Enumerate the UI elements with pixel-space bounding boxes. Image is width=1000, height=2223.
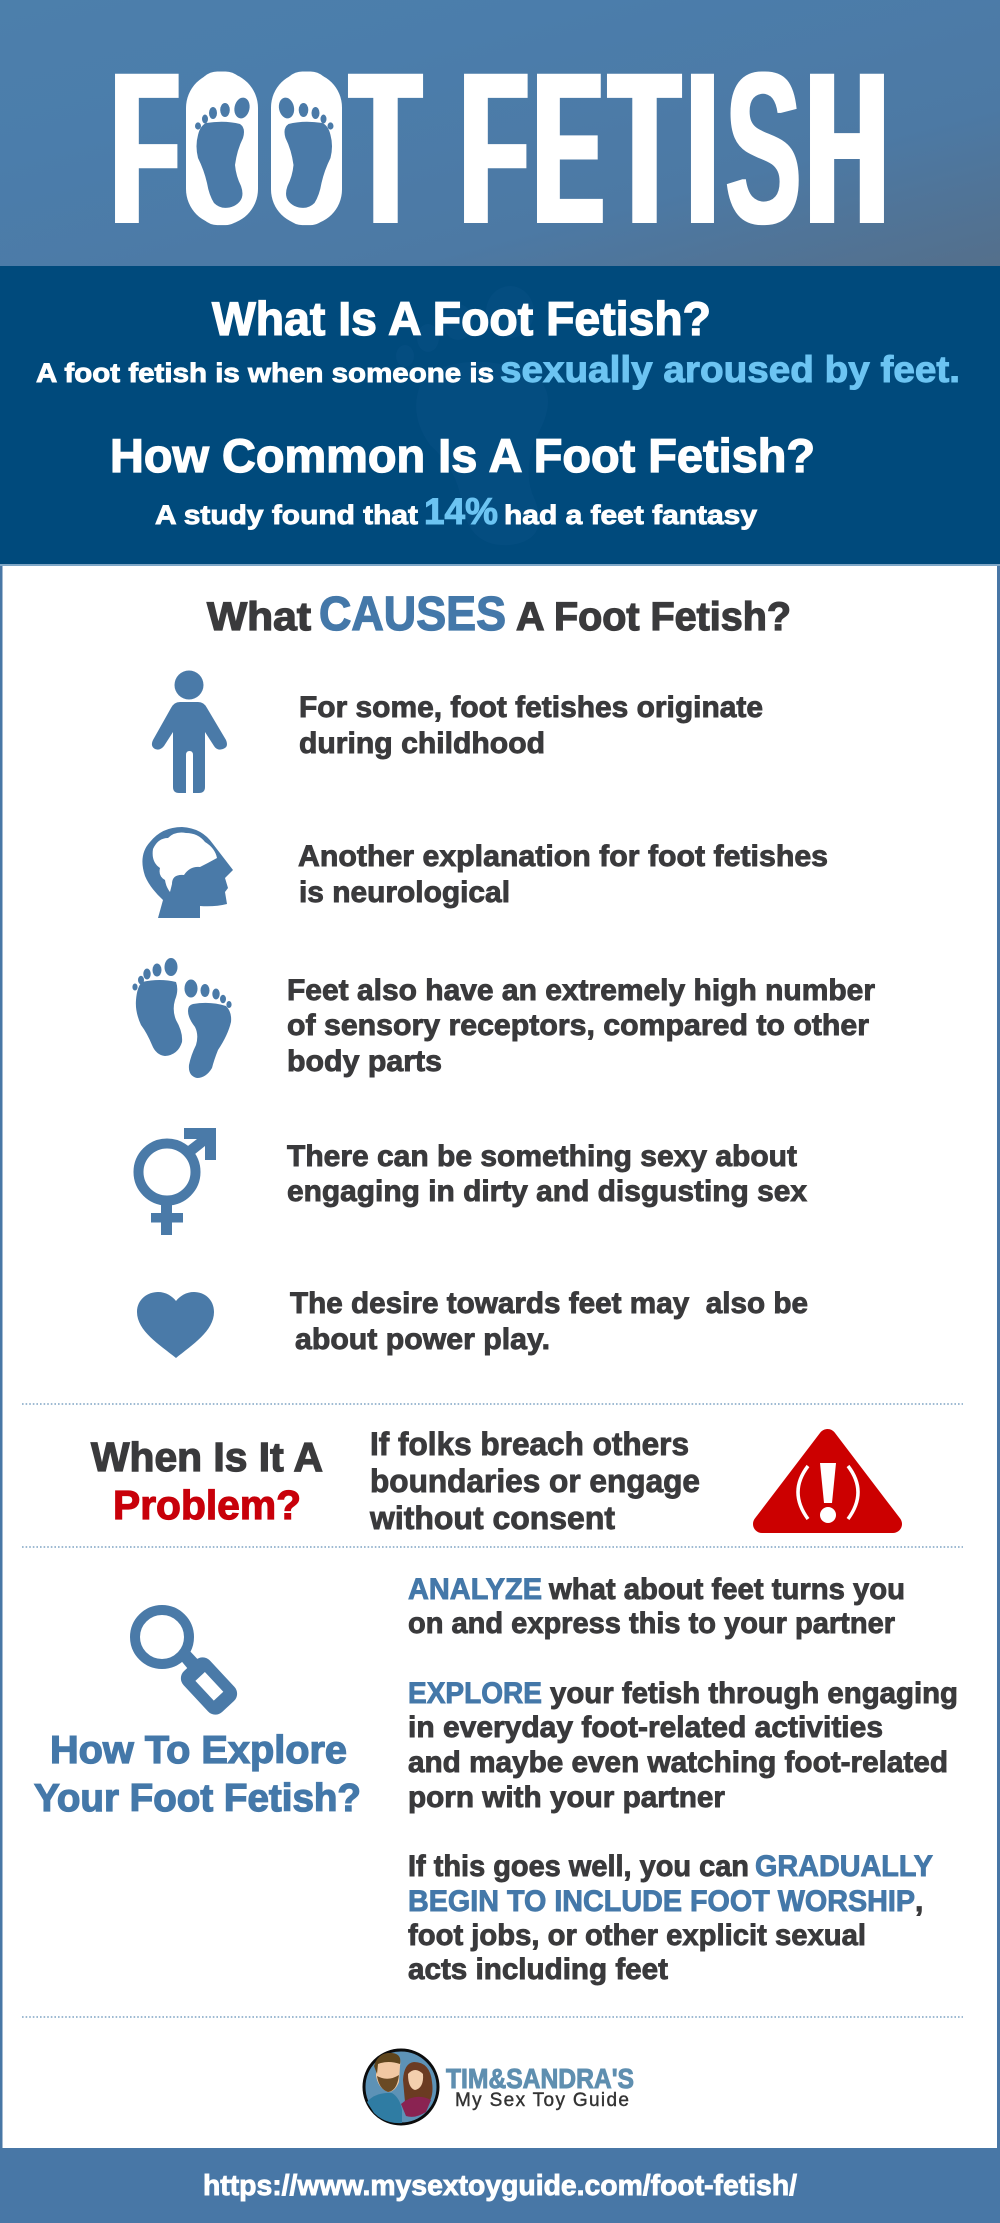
page side borders <box>0 566 1000 2151</box>
text: cause 5: The desire towards feet may also be <box>290 1287 808 1320</box>
text: explore step <box>408 1677 958 1814</box>
icon: child figure <box>152 670 227 793</box>
heading: when is it a problem <box>91 1434 323 1528</box>
logo: Tim and Sandra's portrait badge <box>364 2050 438 2124</box>
title: FOOT FETISH: F <box>112 27 179 270</box>
text: explore step: porn with your partner <box>408 1781 725 1814</box>
icon: head with brain <box>142 827 233 918</box>
text: cause 4: engaging in dirty and disgusting sex <box>287 1175 807 1208</box>
title: FOOT FETISH: I <box>688 28 717 270</box>
text: cause 5: about power play. <box>295 1323 550 1356</box>
text: problem description: without consent <box>369 1500 615 1536</box>
text: cause 3: Feet also have an extremely high number <box>287 974 875 1007</box>
text: definition: A foot fetish is when someone is <box>36 358 494 388</box>
text: cause 5 <box>290 1287 808 1356</box>
text: cause 1: during childhood <box>299 727 545 760</box>
heading: what is a foot fetish: What Is A Foot Fetish? <box>212 292 711 345</box>
text: study result: A study found that <box>155 500 418 530</box>
text: gradually step <box>408 1850 933 1986</box>
icon: right footprint in second O <box>277 96 334 208</box>
text: cause 1 <box>299 691 763 760</box>
text: cause 2: is neurological <box>299 876 510 909</box>
heading: what causes a foot fetish: What <box>207 595 311 639</box>
text: explore step: in everyday foot-related activities <box>408 1711 883 1744</box>
text: cause 2: Another explanation for foot fetishes <box>298 840 828 873</box>
heading: how to explore: How To Explore <box>50 1729 347 1772</box>
text: analyze step: ANALYZE <box>408 1573 542 1606</box>
text: study result: had a feet fantasy <box>504 500 757 530</box>
text: problem description: If folks breach others <box>370 1426 689 1462</box>
title: FOOT FETISH: T <box>610 26 679 269</box>
text: gradually step: GRADUALLY <box>755 1850 933 1883</box>
text: explore step: and maybe even watching foot-related <box>408 1746 948 1779</box>
text: analyze step <box>408 1573 905 1640</box>
text: cause 4: There can be something sexy about <box>287 1140 797 1173</box>
icon: gender symbol <box>138 1128 216 1235</box>
heading: what causes a foot fetish: A Foot Fetish? <box>516 595 791 639</box>
text: study result: 14% <box>424 491 498 532</box>
text: cause 1: For some, foot fetishes originate <box>299 691 763 724</box>
panel: what is / how common <box>0 266 1000 566</box>
logo text: TIM&SANDRA'S <box>446 2063 634 2094</box>
text: gradually step: foot jobs, or other explicit sexual <box>408 1919 866 1952</box>
text: analyze step: on and express this to your partner <box>408 1607 895 1640</box>
text: gradually step: , <box>915 1885 923 1918</box>
heading: how common is a foot fetish: How Common Is A Foot Fetish? <box>110 429 815 482</box>
text: explore step: your fetish through engaging <box>550 1677 958 1710</box>
text: analyze step: what about feet turns you <box>548 1573 905 1606</box>
logo text: My Sex Toy Guide <box>455 2090 629 2111</box>
icon: pair of feet <box>132 958 232 1078</box>
text: footer URL: https://www.mysextoyguide.com/foot-fetish/ <box>203 2170 797 2202</box>
title: FOOT FETISH: O <box>186 29 257 270</box>
text: definition <box>36 349 960 390</box>
text: problem description: boundaries or engage <box>370 1463 700 1499</box>
heading: how to explore <box>34 1729 361 1820</box>
text: cause 3 <box>287 974 875 1078</box>
icon: warning triangle <box>762 1438 893 1524</box>
footer bar <box>0 2148 1000 2223</box>
text: gradually step: BEGIN TO INCLUDE FOOT WORSHIP <box>408 1885 915 1918</box>
title: FOOT FETISH: H <box>806 27 888 269</box>
heading: when is it a problem: When Is It A <box>91 1434 323 1480</box>
title: FOOT FETISH: T <box>351 26 420 269</box>
text: cause 3: of sensory receptors, compared to other <box>287 1009 869 1042</box>
title: FOOT FETISH <box>112 26 888 270</box>
text: study result <box>155 491 757 532</box>
title: FOOT FETISH: O <box>271 29 342 270</box>
header banner <box>0 0 1000 266</box>
text: cause 4 <box>287 1140 807 1208</box>
heading: how to explore: Your Foot Fetish? <box>34 1777 361 1820</box>
text: explore step: EXPLORE <box>408 1677 542 1710</box>
icon: magnifying glass <box>135 1610 241 1719</box>
logo text <box>446 2063 634 2111</box>
icon: watermark footprint <box>396 286 548 545</box>
icon: left footprint in first O <box>195 96 252 208</box>
heading: what causes a foot fetish <box>207 588 791 641</box>
heading: what causes a foot fetish: CAUSES <box>319 588 506 641</box>
text: problem description <box>369 1426 700 1536</box>
title: FOOT FETISH: E <box>534 26 603 269</box>
text: definition: sexually aroused by feet. <box>500 349 960 390</box>
heading: when is it a problem: Problem? <box>113 1482 301 1528</box>
text: cause 2 <box>298 840 828 909</box>
text: gradually step: If this goes well, you can <box>408 1850 749 1883</box>
text: cause 3: body parts <box>287 1045 442 1078</box>
title: FOOT FETISH: S <box>725 27 802 269</box>
text: gradually step: acts including feet <box>408 1953 668 1986</box>
title: FOOT FETISH: F <box>461 27 528 270</box>
icon: heart <box>137 1292 214 1358</box>
